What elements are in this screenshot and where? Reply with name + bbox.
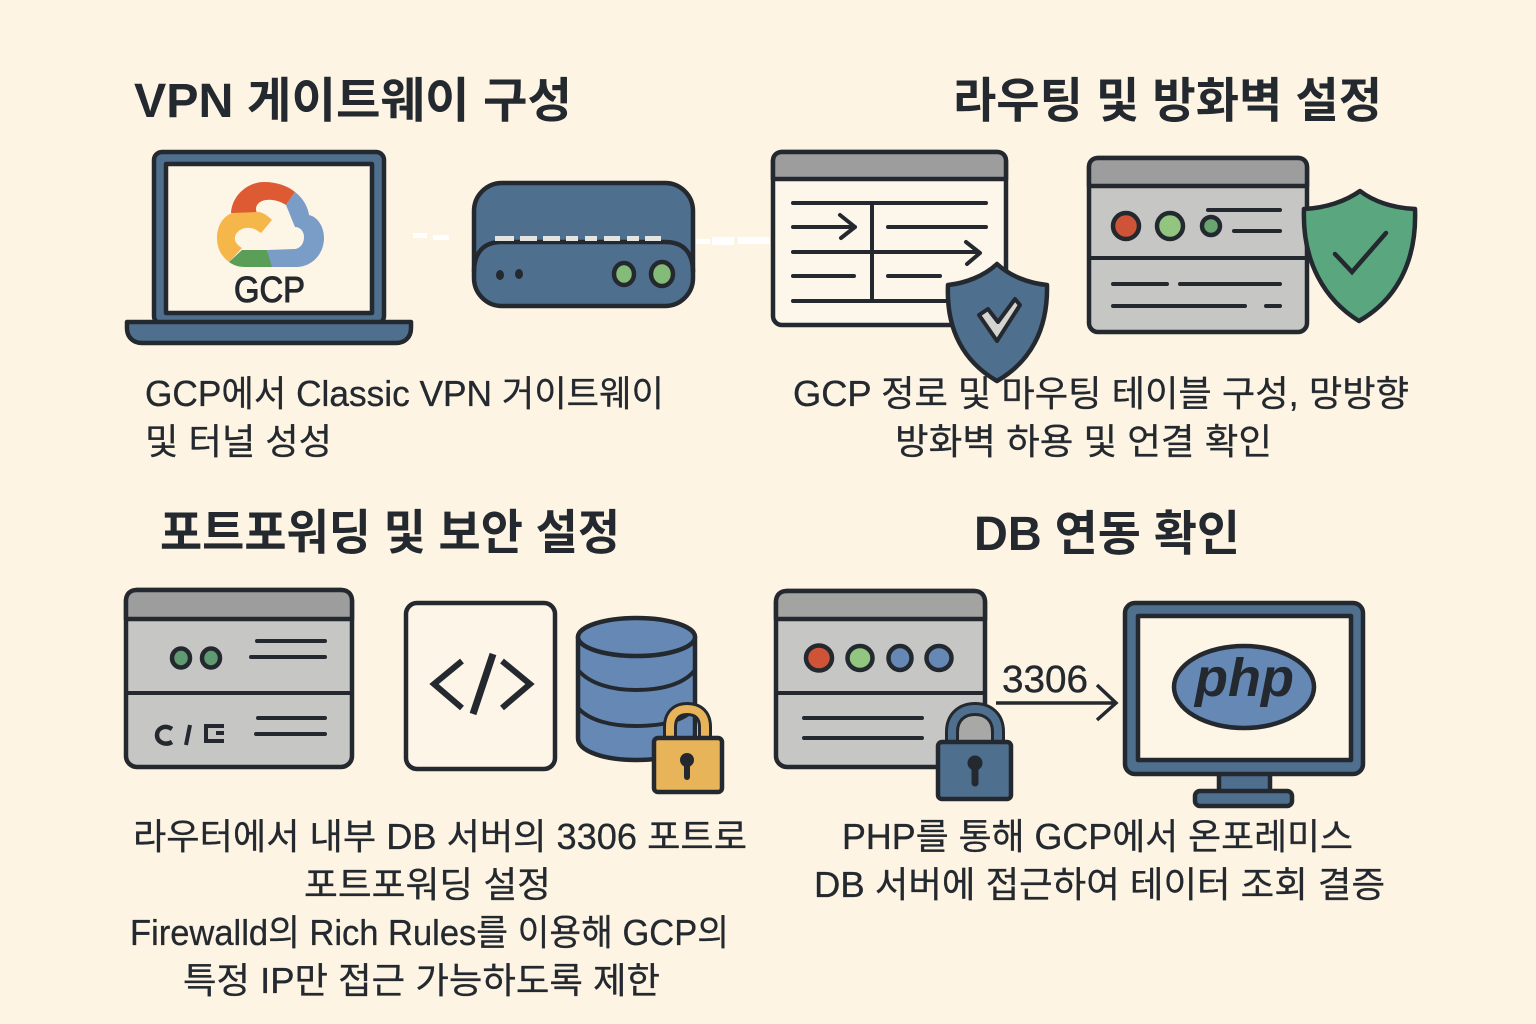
icon: code window bbox=[406, 603, 555, 769]
icon: monitor with PHP logo bbox=[1125, 603, 1363, 806]
icon: green shield bbox=[1304, 191, 1415, 321]
icon: PHP logo bbox=[1174, 646, 1314, 728]
label: GCP: GCP bbox=[234, 269, 305, 310]
connector: dashes left of router bbox=[413, 233, 449, 240]
icon: routing table bbox=[773, 152, 1006, 325]
label: port 3306: 3306 bbox=[1002, 659, 1088, 701]
icon: DB server bbox=[776, 591, 985, 767]
text block: port forwarding description bbox=[130, 816, 747, 1001]
text block: routing description: 방화벽 하용 및 언결 확인 bbox=[895, 421, 1272, 462]
text block: routing description: GCP 정로 및 마우팅 테이블 구성, 망방향 bbox=[793, 373, 1409, 414]
heading: DB connection: DB 연동 확인 bbox=[974, 508, 1240, 561]
arrow: server to PHP bbox=[996, 685, 1116, 720]
panel: port forwarding and security bbox=[126, 507, 747, 1001]
text block: port forwarding description: 특정 IP만 접근 가능하도록 제한 bbox=[183, 960, 660, 1001]
heading: routing and firewall: 라우팅 및 방화벽 설정 bbox=[953, 75, 1382, 128]
icon: gold padlock bbox=[654, 709, 722, 792]
heading: port forwarding: 포트포워딩 및 보안 설정 bbox=[160, 507, 620, 560]
icon: VPN router bbox=[474, 183, 693, 306]
text block: DB connection description: PHP를 통해 GCP에서 온포레미스 bbox=[842, 816, 1353, 857]
text block: VPN gateway description bbox=[145, 373, 664, 462]
text block: port forwarding description: 포트포워딩 설정 bbox=[304, 864, 551, 905]
text block: routing description bbox=[793, 373, 1409, 462]
icon: blue padlock bbox=[938, 709, 1011, 799]
icon: GCP cloud logo bbox=[217, 182, 324, 267]
text block: port forwarding description: 라우터에서 내부 DB 서버의 3306 포트로 bbox=[133, 816, 747, 857]
text block: VPN gateway description: 및 터널 성성 bbox=[145, 421, 332, 462]
icon: server with status lights bbox=[1089, 158, 1307, 332]
heading: VPN gateway: VPN 게이트웨이 구성 bbox=[134, 75, 572, 128]
text block: DB connection description: DB 서버에 접근하여 테이터 조회 결증 bbox=[814, 864, 1385, 905]
text block: DB connection description bbox=[814, 816, 1385, 905]
icon: PHP logo: php bbox=[1193, 648, 1294, 708]
text block: port forwarding description: Firewalld의 Rich Rules를 이용해 GCP의 bbox=[130, 912, 729, 953]
icon: database bbox=[578, 618, 695, 760]
text block: VPN gateway description: GCP에서 Classic VPN 거이트웨이 bbox=[145, 373, 664, 414]
panel: DB connection check bbox=[776, 508, 1385, 905]
icon: laptop with GCP logo bbox=[127, 152, 411, 343]
icon: blue shield bbox=[948, 264, 1047, 381]
panel: VPN gateway bbox=[127, 75, 770, 462]
connector: dashes right of router bbox=[696, 237, 770, 245]
icon: server bbox=[126, 590, 352, 767]
panel: routing and firewall bbox=[773, 75, 1415, 462]
